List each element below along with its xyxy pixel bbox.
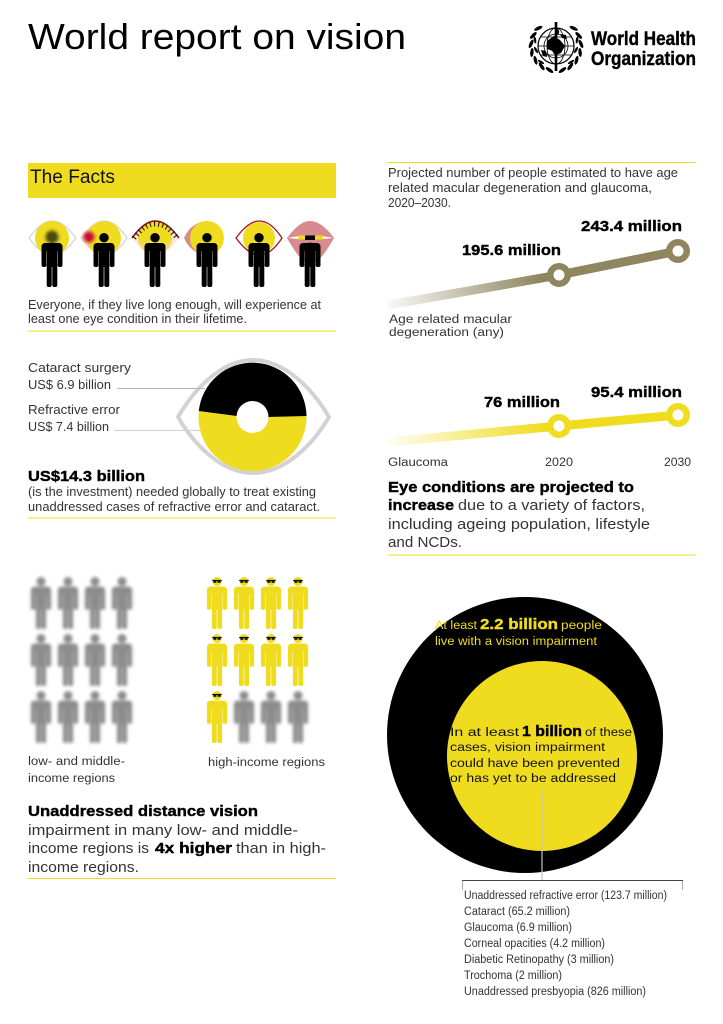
list: causes: Unaddressed refractive error (123.7 million) — [464, 890, 667, 902]
label: cataract surgery: Cataract surgery — [28, 360, 132, 375]
text: eye conditions projected to increase: due to a variety of factors, — [458, 497, 645, 514]
label: refractive error — [28, 402, 200, 434]
icons: six eye conditions with figures — [29, 221, 334, 287]
line chart: glaucoma: 76 million — [484, 395, 560, 411]
labels: regions: low- and middle- — [28, 756, 125, 768]
icon: eye with lashes — [132, 221, 179, 287]
list: causes: Unaddressed presbyopia (826 million) — [464, 986, 646, 998]
logo wordmark — [591, 29, 696, 70]
line chart: glaucoma — [388, 385, 691, 469]
labels: regions — [28, 756, 325, 785]
list: causes: Corneal opacities (4.2 million) — [464, 938, 605, 950]
text: projected number — [388, 165, 678, 210]
text: unaddressed distance vision: than in high- — [236, 840, 326, 857]
list: causes: Glaucoma (6.9 million) — [464, 922, 572, 934]
text: projected number: 2020–2030. — [388, 195, 451, 210]
icon: almost closed eye — [287, 221, 334, 287]
text: unaddressed distance vision: income regions is — [28, 840, 149, 857]
text: US$14.3 billion: unaddressed cases of refractive error and cataract. — [28, 499, 320, 514]
eye outline — [178, 360, 329, 473]
text: unaddressed distance vision: Unaddressed distance vision — [28, 803, 258, 820]
donut chart — [198, 363, 306, 471]
heading bar — [28, 163, 336, 198]
pictogram: high-income regions — [207, 577, 308, 743]
label: refractive error: Refractive error — [28, 402, 121, 417]
text: eye conditions projected to increase: and NCDs. — [388, 534, 462, 551]
text: unaddressed distance vision: 4x higher — [155, 840, 232, 857]
pictogram: low- and middle-income regions — [31, 577, 132, 743]
circle: 2.2 billion — [387, 597, 663, 873]
panel: projections — [388, 162, 696, 556]
text: everyone: Everyone, if they live long enough, will experience at — [28, 297, 321, 312]
label: cataract surgery — [28, 360, 205, 392]
line chart: age related macular degeneration: Age related macular — [389, 314, 512, 326]
panel: vision impairment circles — [387, 597, 683, 998]
text: US$14.3 billion — [28, 468, 320, 514]
circle: 1 billion: cases, vision impairment — [450, 742, 606, 754]
circle: 2.2 billion: people — [561, 620, 602, 632]
labels: regions: income regions — [28, 773, 115, 785]
icon: eye with central blur — [29, 221, 76, 287]
heading bar: The Facts — [30, 167, 115, 188]
text: projected number: Projected number of people estimated to have age — [388, 165, 678, 180]
text: US$14.3 billion: (is the investment) needed globally to treat existing — [28, 484, 316, 499]
circle: 2.2 billion: 2.2 billion — [480, 616, 558, 633]
text: unaddressed distance vision — [28, 803, 326, 876]
icon: WHO emblem — [528, 22, 584, 74]
list: causes — [464, 890, 667, 998]
line chart: glaucoma: 95.4 million — [591, 385, 682, 401]
title: World report on vision — [28, 16, 406, 57]
label: refractive error: US$ 7.4 billion — [28, 419, 109, 434]
text: everyone — [28, 297, 321, 326]
text: unaddressed distance vision: impairment in many low- and middle- — [28, 822, 298, 839]
line chart: glaucoma: 2030 — [664, 457, 691, 469]
bracket connector — [462, 790, 683, 890]
circle: 1 billion: could have been prevented — [450, 758, 620, 770]
line chart: glaucoma: Glaucoma — [388, 457, 449, 469]
circle: 2.2 billion: At least — [435, 620, 478, 632]
labels: regions: high-income regions — [208, 757, 325, 769]
circle: 1 billion: of these — [585, 727, 632, 739]
text: eye conditions projected to increase: including ageing population, lifestyle — [388, 516, 650, 533]
circle: 1 billion: or has yet to be addressed — [450, 773, 616, 785]
line chart: age related macular degeneration: 243.4 million — [581, 219, 682, 235]
icon: eye with red spot — [81, 221, 127, 287]
logo wordmark: Organization — [591, 49, 696, 70]
panel: distance vision impairment — [28, 577, 336, 879]
line chart: age related macular degeneration: 195.6 million — [462, 243, 561, 259]
text: eye conditions projected to increase — [388, 479, 650, 551]
text: eye conditions projected to increase: increase — [388, 497, 454, 514]
logo wordmark: World Health — [591, 29, 696, 50]
line chart: age related macular degeneration: degeneration (any) — [389, 327, 504, 339]
panel: investment eye chart — [28, 360, 336, 518]
logo: World Health Organization — [528, 22, 696, 74]
circle: 2.2 billion: live with a vision impairment — [435, 636, 598, 648]
circle: 1 billion: In at least — [450, 727, 520, 739]
icon: eye with red outline — [236, 221, 282, 287]
panel: the facts — [28, 163, 336, 332]
text: unaddressed distance vision: income regions. — [28, 859, 139, 876]
list: causes: Cataract (65.2 million) — [464, 906, 570, 918]
line chart: glaucoma: 2020 — [545, 457, 573, 469]
text: everyone: least one eye condition in their lifetime. — [28, 311, 247, 326]
list: causes: Diabetic Retinopathy (3 million) — [464, 954, 614, 966]
circle: 1 billion: 1 billion — [522, 723, 582, 740]
text: eye conditions projected to increase: Eye conditions are projected to — [388, 479, 634, 496]
text: US$14.3 billion: US$14.3 billion — [28, 468, 145, 485]
line chart: age related macular degeneration — [388, 219, 687, 339]
text: projected number: related macular degeneration and glaucoma, — [388, 180, 652, 195]
label: cataract surgery: US$ 6.9 billion — [28, 377, 111, 392]
list: causes: Trochoma (2 million) — [464, 970, 562, 982]
icon: eye with pink lid — [184, 221, 224, 287]
circle: 1 billion — [447, 661, 637, 851]
